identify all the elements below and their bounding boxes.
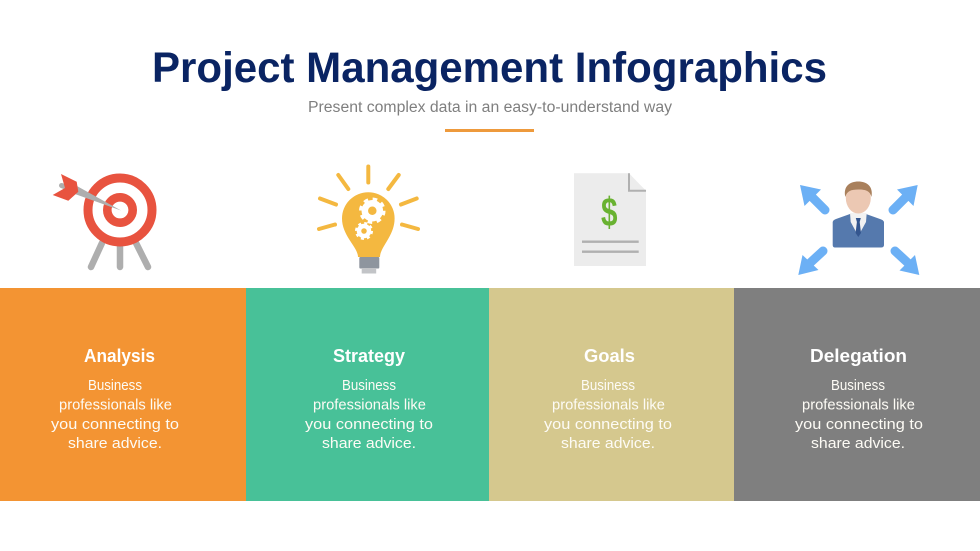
icon: target with arrow <box>53 174 152 267</box>
text: Strategy description: share advice. <box>322 435 416 452</box>
heading: Analysis: Analysis <box>84 346 155 366</box>
icon: financial document: $ <box>601 189 618 235</box>
heading: Goals: Goals <box>584 346 635 366</box>
text: Strategy description <box>305 377 433 452</box>
text: Delegation description: professionals like <box>802 396 915 414</box>
icon: light bulb with gears <box>319 166 418 274</box>
title: Project Management Infographics <box>152 44 827 92</box>
text: Goals description <box>544 377 672 452</box>
title accent line <box>445 129 534 132</box>
text: Strategy description: you connecting to <box>305 416 433 433</box>
text: Delegation description: Business <box>831 377 885 394</box>
text: Delegation description: you connecting to <box>795 416 923 433</box>
heading: Delegation: Delegation <box>810 346 907 366</box>
text: Delegation description: share advice. <box>811 435 905 452</box>
panel: Analysis <box>0 288 246 501</box>
text: Strategy description: Business <box>342 377 396 394</box>
text: Analysis description: professionals like <box>59 396 172 414</box>
icon: financial document <box>574 173 646 266</box>
text: Goals description: share advice. <box>561 435 655 452</box>
icon: delegating person with arrows <box>798 182 919 275</box>
heading: Strategy: Strategy <box>333 346 405 366</box>
text: Analysis description <box>51 377 179 452</box>
text: Delegation description <box>795 377 923 452</box>
panel: Strategy <box>246 288 489 501</box>
text: Goals description: Business <box>581 377 635 394</box>
panel: Delegation <box>734 288 980 501</box>
panel: Goals <box>489 288 734 501</box>
text: Goals description: professionals like <box>552 396 665 414</box>
text: Analysis description: share advice. <box>68 435 162 452</box>
subtitle: Present complex data in an easy-to-understand way <box>308 99 672 116</box>
text: Analysis description: you connecting to <box>51 416 179 433</box>
text: Strategy description: professionals like <box>313 396 426 414</box>
text: Goals description: you connecting to <box>544 416 672 433</box>
text: Analysis description: Business <box>88 377 142 394</box>
